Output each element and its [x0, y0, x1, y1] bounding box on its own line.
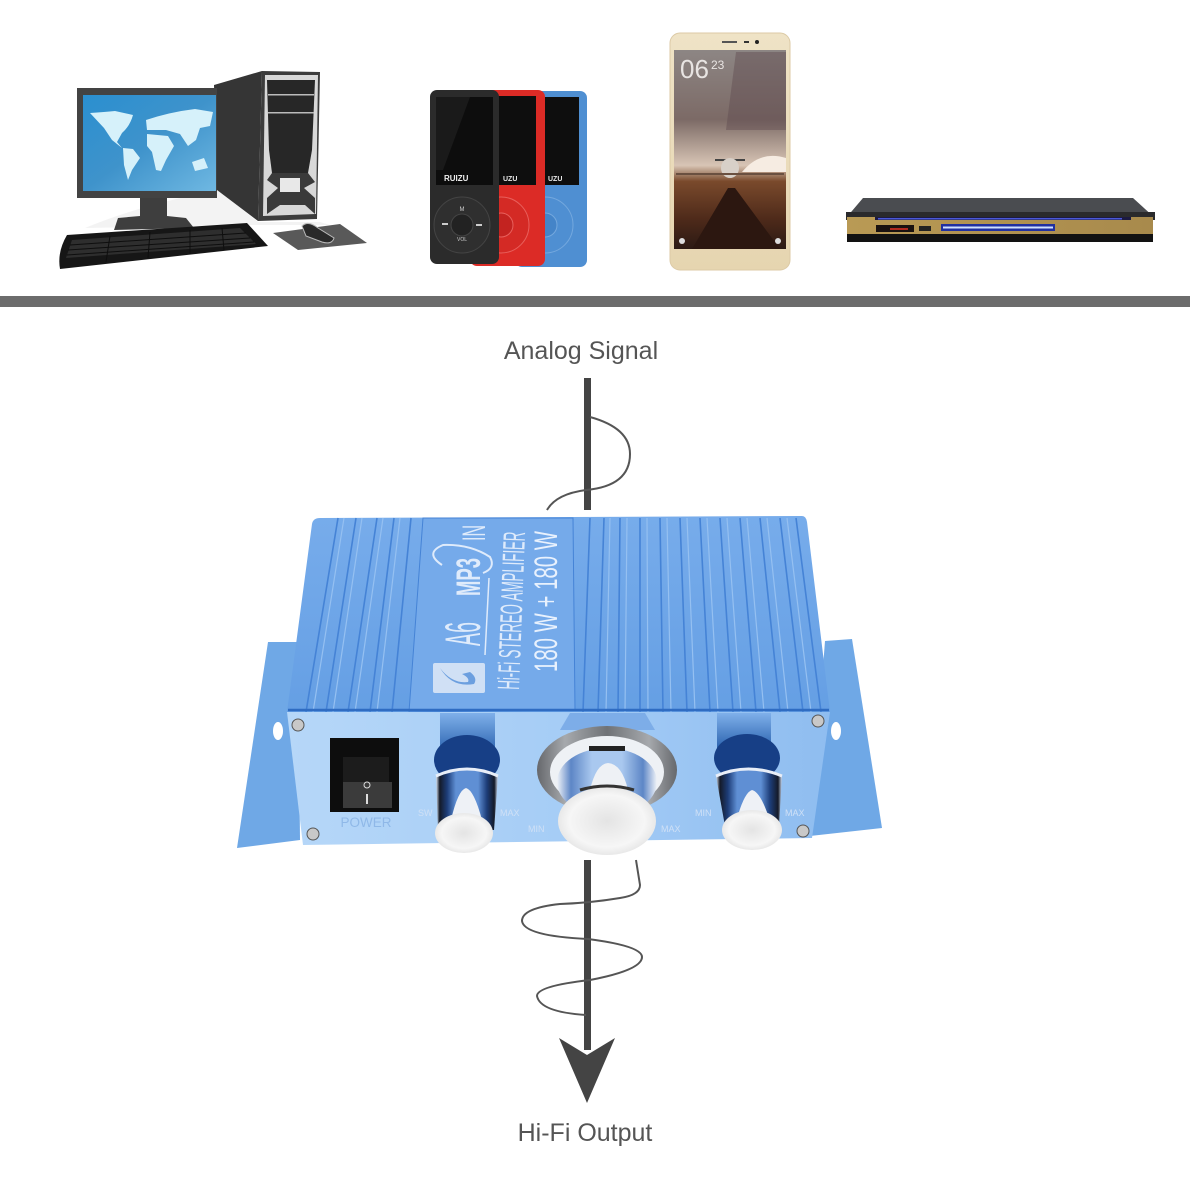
red player: UZU: [503, 176, 517, 183]
icon: MP3 players: [430, 90, 587, 267]
mouse pad: [273, 224, 367, 250]
red player: [470, 90, 545, 266]
black player: VOL: [457, 237, 467, 243]
product: amplifier: [237, 516, 882, 855]
blue player: [515, 91, 587, 267]
blue player: UZU: [548, 176, 562, 183]
label plate: [409, 518, 575, 712]
computer tower: [214, 71, 320, 221]
keyboard: [59, 223, 268, 269]
icon: desktop computer: [59, 71, 367, 269]
black player: M: [460, 207, 464, 213]
wave: analog input: [547, 417, 630, 510]
label: power rating: 180 W + 180 W: [528, 530, 564, 672]
power switch: [330, 738, 399, 812]
brand logo: [433, 663, 485, 693]
top plate with ribs: [287, 516, 830, 712]
heading: Hi-Fi Output: Hi-Fi Output: [518, 1119, 652, 1147]
label: IN: IN: [456, 525, 492, 541]
monitor stand: [114, 195, 194, 230]
label: music swoosh arc: [433, 545, 492, 573]
mounting flange right: [810, 639, 882, 836]
icon: smartphone: 23: [711, 58, 725, 72]
label: MAX left: MAX: [500, 808, 520, 818]
signal line: input: [584, 378, 591, 510]
mouse: [302, 223, 334, 243]
knob: left treble: SW: [418, 808, 433, 818]
label: POWER: POWER: [340, 815, 392, 830]
front panel: [287, 712, 830, 845]
icon: DVD player: [846, 198, 1155, 242]
monitor: [77, 88, 217, 230]
divider bar: [0, 296, 1190, 307]
airplane: [676, 158, 784, 178]
text: Hi-Fi STEREO AMPLIFIER: [491, 531, 532, 690]
knob: right bass: [695, 713, 782, 850]
arrow: output: [559, 860, 615, 1103]
dark lower edge of top plate: [288, 709, 829, 711]
label: MAX centre: MAX: [661, 824, 681, 834]
heading: Analog Signal: Analog Signal: [504, 337, 658, 365]
label underline: [485, 578, 489, 655]
label: MIN: MIN: [528, 824, 544, 834]
desk shadow: [85, 190, 330, 228]
label: MAX right: MAX: [785, 808, 805, 818]
knob: right bass: MIN: [695, 808, 712, 818]
knob: left treble: [418, 713, 500, 853]
icon: smartphone: [670, 33, 790, 270]
top plate with ribs: A6: [435, 622, 491, 646]
screw holes and screws: [273, 715, 841, 840]
label: MP3: MP3: [450, 558, 488, 596]
black player: [430, 90, 499, 264]
black player: RUIZU: [444, 174, 469, 183]
clock: 06: [680, 54, 709, 84]
world map: [90, 109, 213, 180]
mounting flange left: [237, 642, 300, 848]
knob: centre volume: [537, 713, 677, 855]
wave: amplified output: [522, 860, 642, 1015]
